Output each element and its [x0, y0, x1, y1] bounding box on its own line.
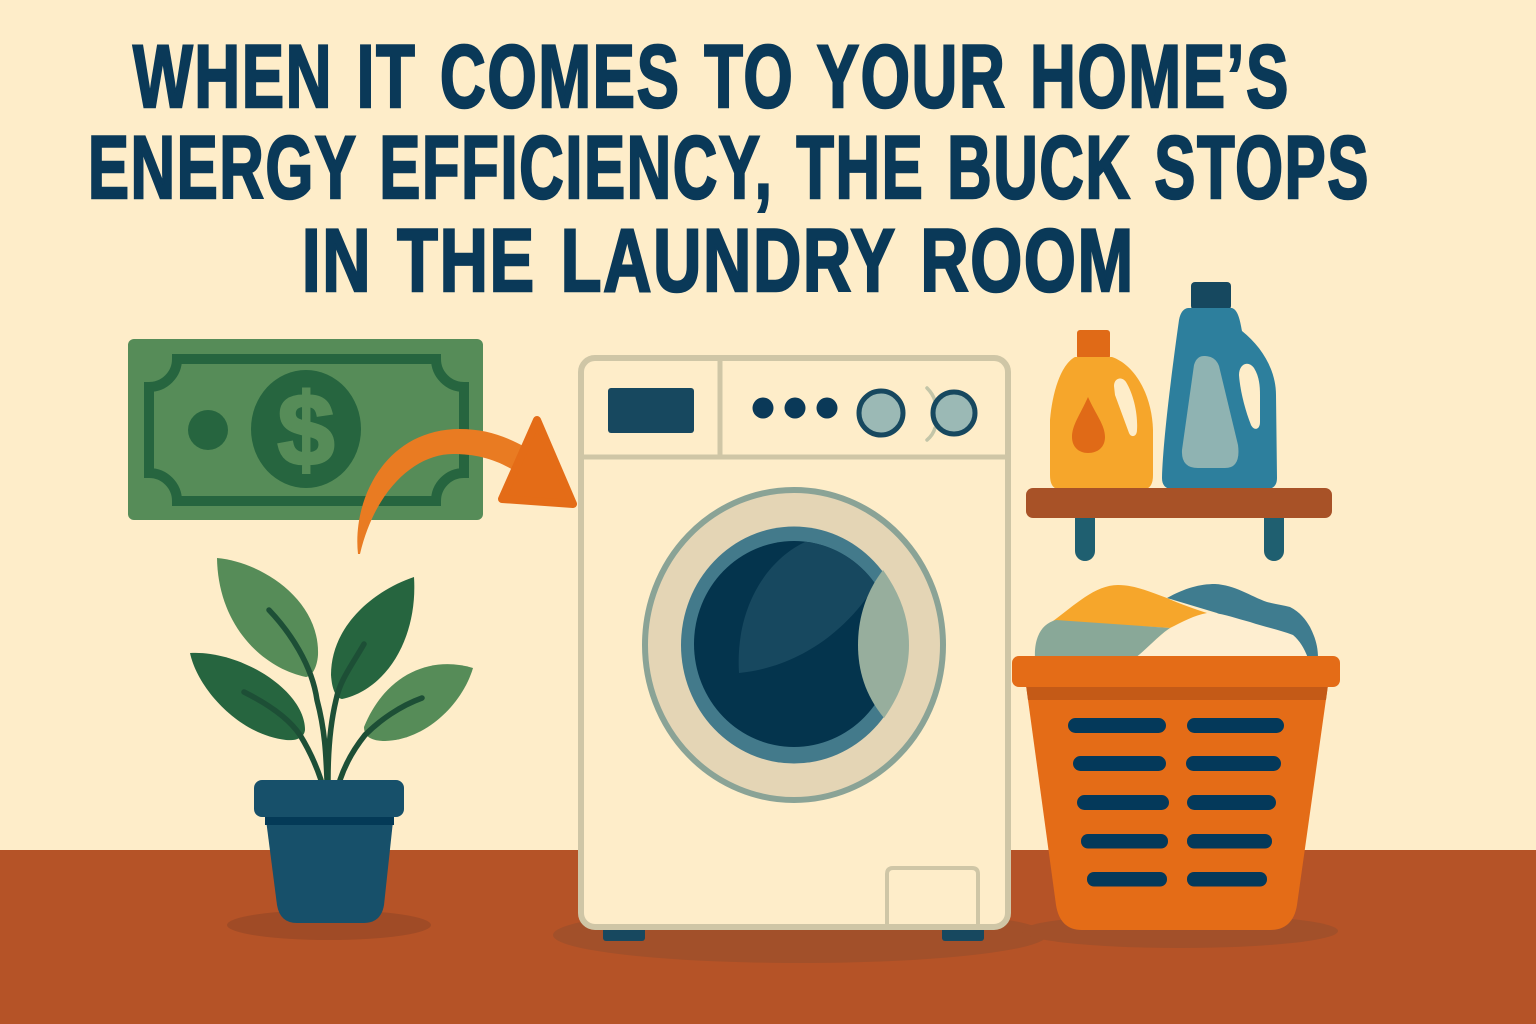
basket rim [1012, 656, 1340, 687]
washing machine [581, 358, 1008, 941]
shelf brackets [1075, 515, 1284, 561]
title: IN THE LAUNDRY ROOM [302, 210, 1135, 310]
door [645, 490, 943, 800]
blue bottle [1162, 282, 1277, 489]
orange bottle [1050, 330, 1153, 489]
control panel dividers [581, 358, 1008, 457]
knob two [927, 388, 975, 440]
knob one [859, 391, 903, 435]
basket slots [1068, 718, 1284, 886]
display [608, 388, 694, 433]
icon: plant shadow [227, 910, 431, 940]
service hatch [887, 868, 978, 925]
title [88, 26, 1370, 310]
arrow: money flowing to washer [357, 420, 573, 554]
icon: dollar bill: $ [278, 373, 334, 487]
washer shadow [553, 907, 1047, 963]
laundry clothes [1035, 584, 1318, 658]
washer body [581, 358, 1008, 927]
icon: dollar bill [128, 339, 483, 520]
laundry basket [1012, 584, 1340, 930]
shelf board [1026, 488, 1332, 518]
shelf with bottles [1026, 282, 1332, 561]
basket rim shade [1026, 685, 1328, 700]
basket shadow [1022, 914, 1338, 948]
basket body [1026, 685, 1328, 930]
icon: potted plant [190, 558, 473, 923]
washer feet [603, 926, 984, 941]
floor [0, 850, 1536, 1024]
buttons [752, 398, 838, 418]
